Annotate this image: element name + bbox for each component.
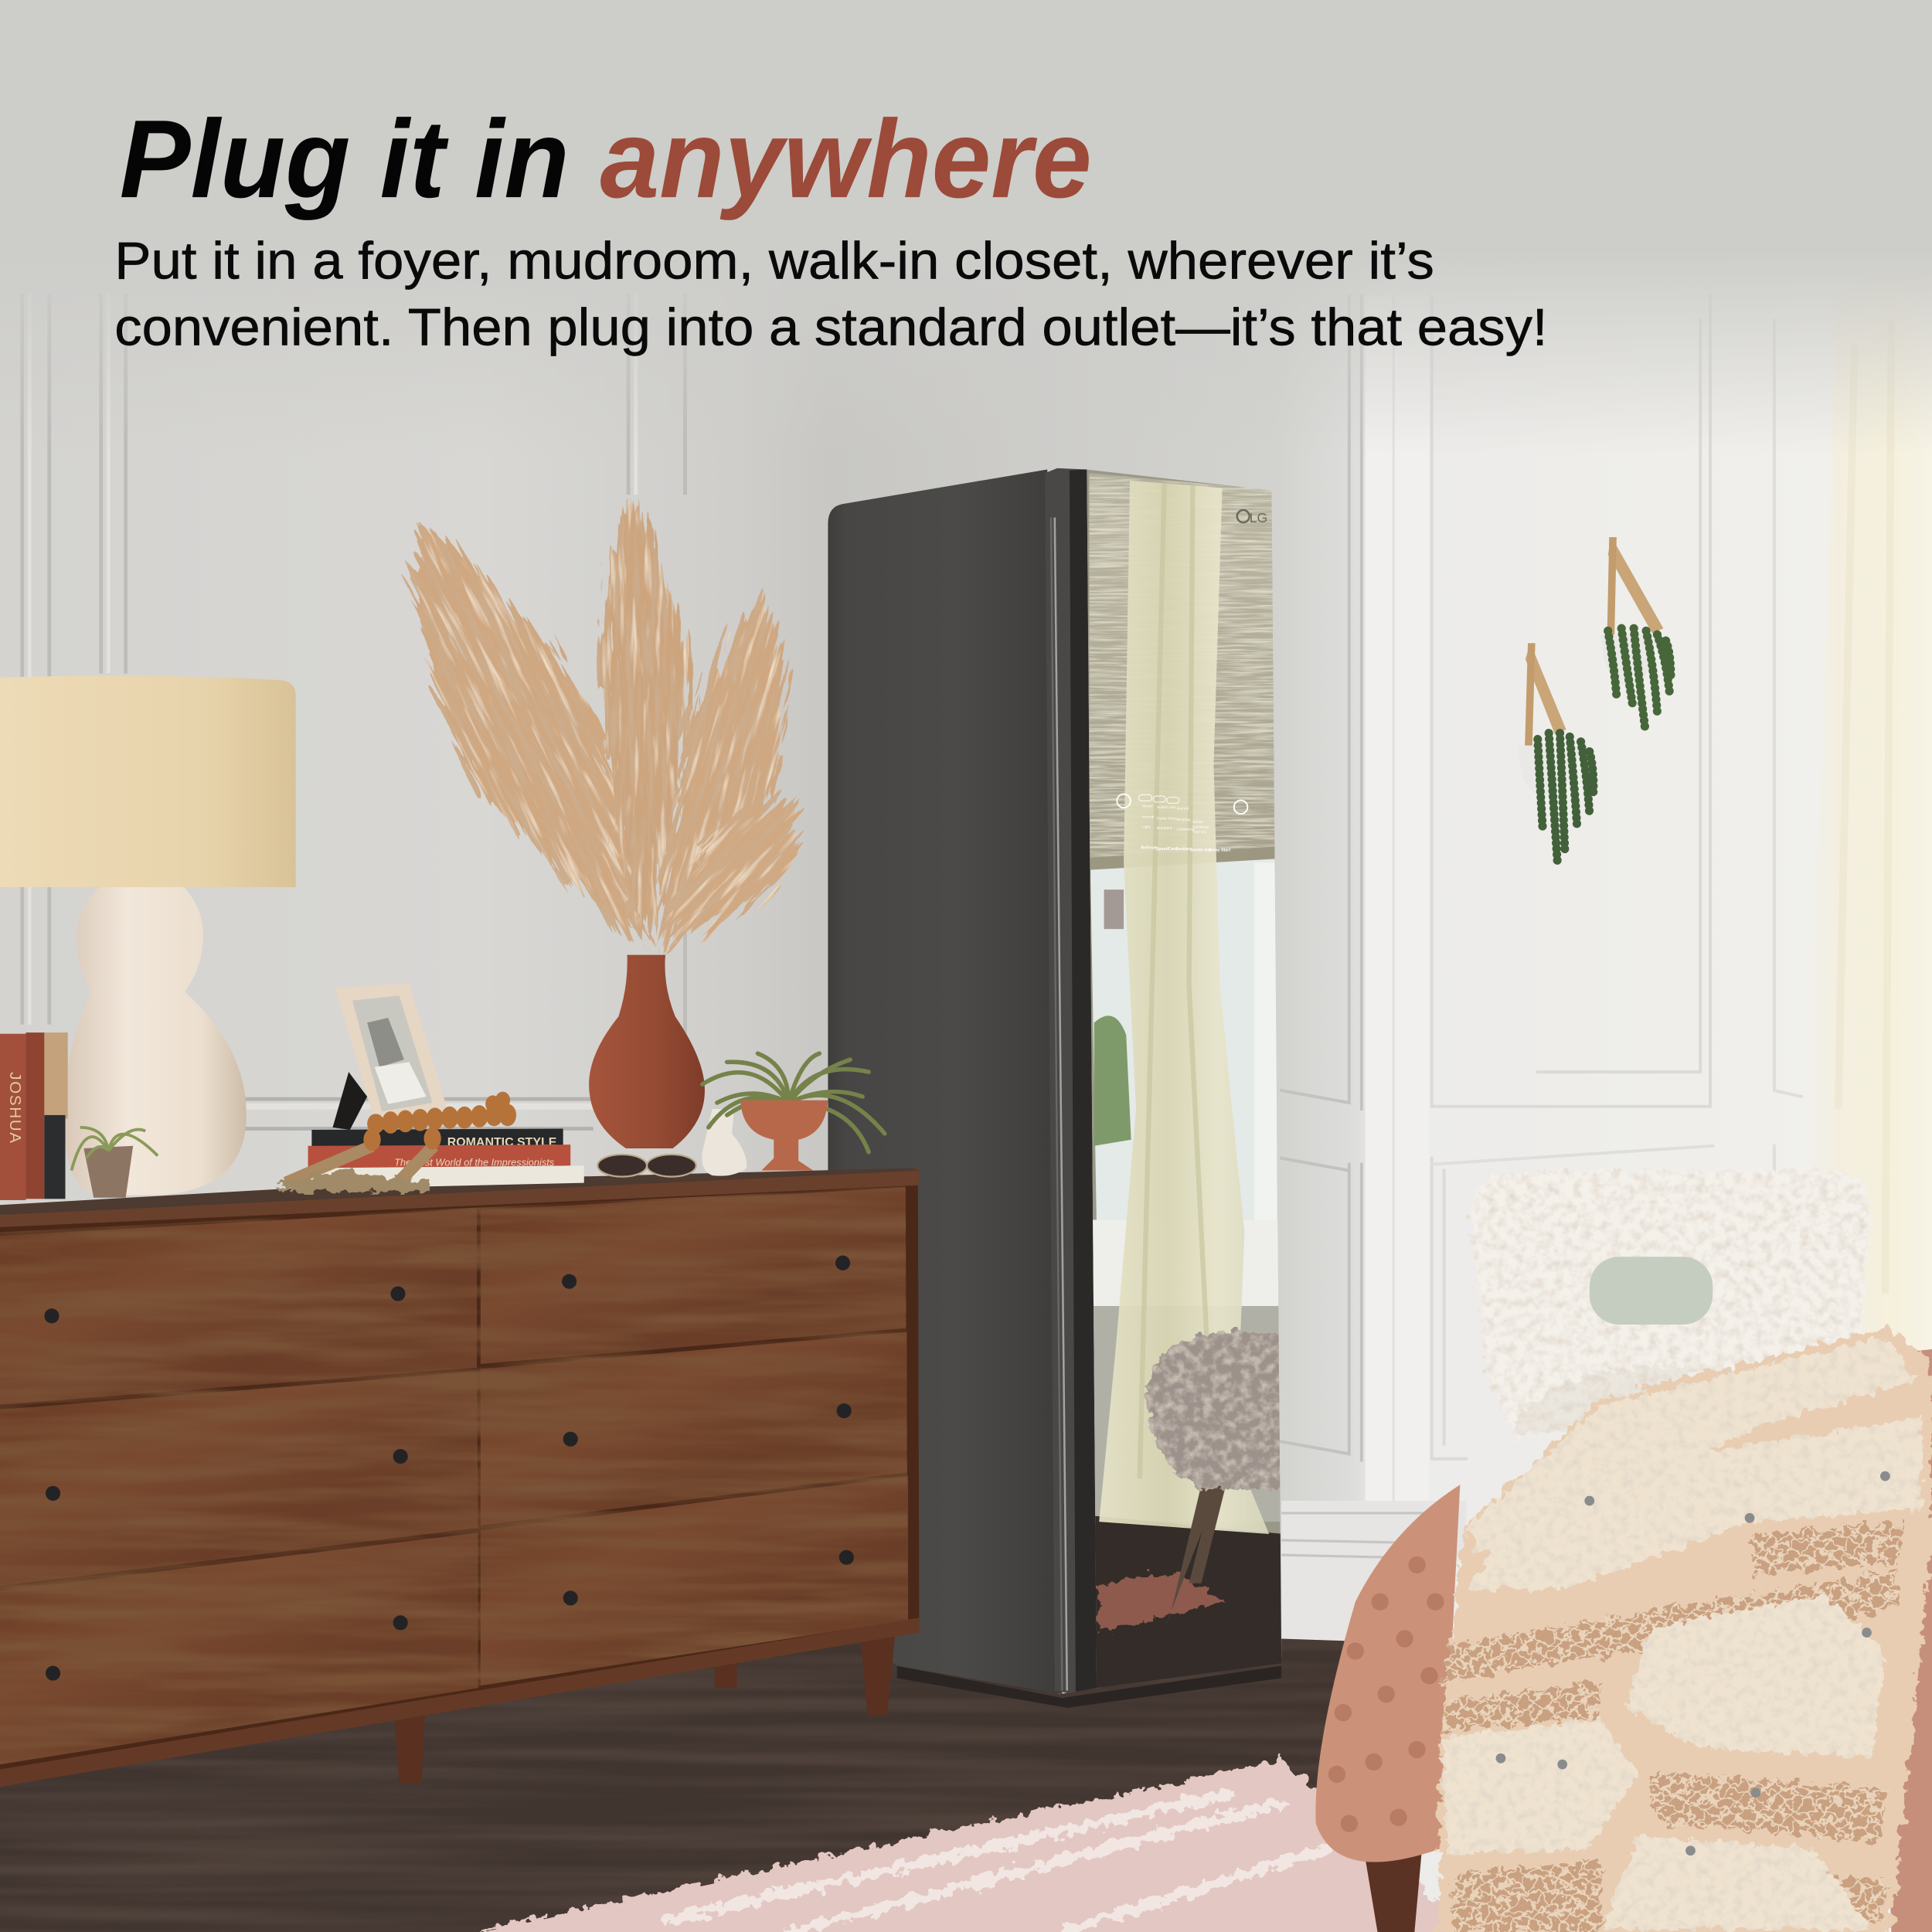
- chair cut-out: [1590, 1257, 1713, 1325]
- lamp base: [64, 883, 247, 1196]
- plume left: [358, 491, 701, 987]
- reflected mat: [1099, 1571, 1230, 1633]
- planter right: [1600, 537, 1671, 727]
- bed and pillow: [1315, 1349, 1932, 1932]
- description text: [114, 232, 1548, 356]
- title: anywhere: [600, 97, 1092, 221]
- mirror display: Bedding: [1177, 818, 1190, 822]
- reflected window: [1090, 859, 1281, 1226]
- LG logo: [1237, 510, 1267, 526]
- title: Plug it in: [120, 97, 570, 221]
- terracotta vase: [589, 955, 705, 1148]
- description text: convenient. Then plug into a standard outlet—it’s that easy!: [114, 298, 1548, 356]
- mirror door: [1087, 469, 1284, 1688]
- mirror display: Light: [1142, 825, 1151, 829]
- top fade band: [0, 0, 1932, 456]
- reflected sheer curtain: [1099, 481, 1269, 1534]
- mirror display: Normal: [1142, 815, 1154, 820]
- table lamp: [0, 675, 296, 1196]
- mirror display: Sanitary: [1175, 847, 1192, 852]
- mirror display: Gentle Dry: [1190, 849, 1212, 853]
- floor: [0, 1627, 1355, 1932]
- white candle holder: [702, 1109, 747, 1176]
- chair: [1469, 1171, 1870, 1441]
- lamp shade: [0, 675, 296, 887]
- reflected floor: [1090, 1515, 1284, 1688]
- dresser back legs: [394, 1629, 896, 1783]
- pampas grass: [358, 491, 828, 987]
- woven throw blanket: [1437, 1328, 1932, 1932]
- wooden bead garland: [274, 1092, 516, 1192]
- mirror display: Normal: [1177, 807, 1189, 811]
- books upright: [0, 1032, 68, 1200]
- reflected stool: [1146, 1331, 1284, 1629]
- baseboard: [1281, 1501, 1466, 1645]
- mirror display: Activewear: [1177, 828, 1195, 832]
- bed leg: [1362, 1836, 1423, 1932]
- mirror display: Bombard: [1157, 826, 1172, 831]
- reflected roller shade: [1089, 473, 1277, 870]
- planter left: [1518, 643, 1594, 862]
- plume middle: [596, 492, 695, 956]
- sunglasses: [597, 1155, 696, 1177]
- potted air plant: [702, 1053, 885, 1171]
- mirror display: Pants Press: [1157, 816, 1177, 821]
- bed side: [1872, 1349, 1932, 1932]
- drawer knobs: [44, 1256, 854, 1681]
- dresser frame: [0, 1183, 919, 1787]
- mirror display: Heavy: [1142, 804, 1153, 808]
- title: [120, 97, 1092, 221]
- dresser: [0, 1168, 919, 1787]
- wall mouldings: [22, 296, 1801, 1503]
- picture frame: [332, 983, 447, 1130]
- dresser top: [0, 1168, 919, 1227]
- cabinet side panel: [828, 469, 1062, 1694]
- rug: [474, 1760, 1466, 1932]
- books upright: JOSHUA: [6, 1072, 24, 1145]
- stacked books: ROMANTIC STYLE: [447, 1136, 556, 1149]
- cabinet shadow: [897, 1666, 1281, 1708]
- stacked books: The Lost World of the Impressionists: [394, 1156, 555, 1168]
- plume far right: [631, 773, 828, 978]
- steam closet: [828, 468, 1284, 1708]
- textured pillow: [1315, 1485, 1460, 1862]
- LG logo: LG: [1250, 510, 1267, 526]
- mirror display: SpeedCare: [1156, 847, 1178, 852]
- dresser bottom rail: [0, 1617, 919, 1787]
- plume right: [629, 581, 827, 971]
- wall planters: [1518, 537, 1671, 862]
- mirror display: Knit/Wear: [1192, 825, 1209, 829]
- description text: Put it in a foyer, mudroom, walk-in closet, wherever it’s: [114, 232, 1434, 290]
- drawers: [0, 1188, 908, 1764]
- mirror display: Suits/Coats: [1157, 805, 1176, 810]
- right curtain: [1799, 247, 1932, 1368]
- mirror display: Delay Start: [1209, 849, 1231, 853]
- mirror display: Tote Dry: [1192, 830, 1207, 835]
- mirror display: [1117, 794, 1247, 853]
- mirror display: Refresh: [1141, 846, 1157, 851]
- small air plant: [71, 1128, 158, 1198]
- stacked books: [305, 1128, 584, 1186]
- mirror display: Shawl: [1192, 820, 1202, 825]
- hinge column: [1045, 468, 1097, 1693]
